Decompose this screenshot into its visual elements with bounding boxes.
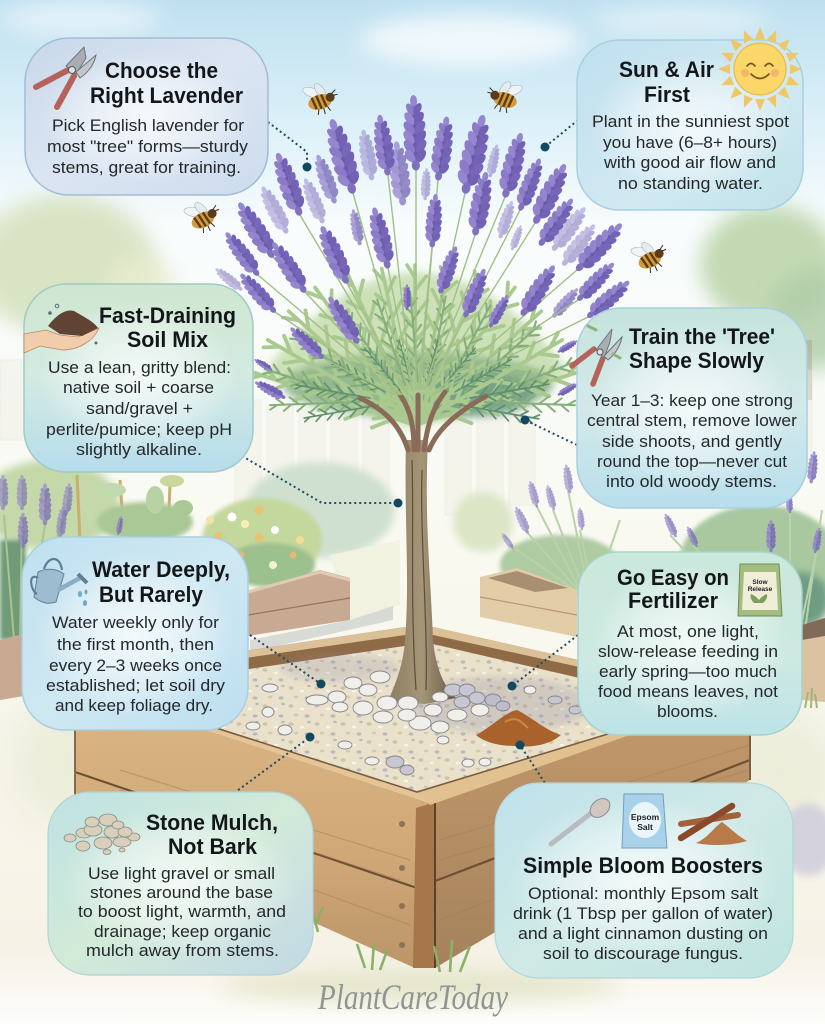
heading: First xyxy=(644,82,691,107)
body text xyxy=(78,864,286,960)
back rim xyxy=(100,627,720,708)
body text xyxy=(46,358,232,459)
body text xyxy=(47,116,249,177)
heading: Right Lavender xyxy=(90,83,243,108)
flower stems xyxy=(258,170,588,395)
body text: round the top—never cut xyxy=(597,452,787,471)
body text: blooms. xyxy=(657,702,718,721)
pale background spikes xyxy=(212,128,602,295)
bee 4 xyxy=(627,233,673,278)
icon: epsom salt bag xyxy=(622,794,667,848)
body text: with good air flow and xyxy=(603,153,776,172)
icon: watering can xyxy=(31,559,88,606)
heading: Fast-Draining xyxy=(99,303,236,328)
body text: central stem, remove lower xyxy=(587,411,797,430)
icon: epsom salt bag: Epsom xyxy=(631,812,660,822)
panel: stone mulch not bark xyxy=(48,792,313,975)
heading xyxy=(99,303,236,352)
heading: Train the 'Tree' xyxy=(629,324,775,349)
body text: perlite/pumice; keep pH xyxy=(46,420,232,439)
body text: established; let soil dry xyxy=(46,676,226,695)
body text xyxy=(592,112,789,193)
front rim xyxy=(75,687,430,803)
icon: slow release bag: Slow xyxy=(752,579,769,586)
grass tufts xyxy=(312,907,470,972)
pale shrubs behind the fence line xyxy=(245,462,395,558)
body text: Plant in the sunniest spot xyxy=(592,112,789,131)
icon: stones pile xyxy=(64,814,140,854)
body text: side shoots, and gently xyxy=(602,432,783,451)
body text: every 2–3 weeks once xyxy=(49,656,222,675)
body text xyxy=(46,613,226,715)
panel: train the tree shape slowly xyxy=(572,308,807,508)
background lavender bush right xyxy=(499,451,825,630)
heading xyxy=(617,565,729,613)
heading xyxy=(629,324,775,373)
icon: cinnamon sticks xyxy=(681,806,747,845)
heading: But Rarely xyxy=(99,582,204,607)
body text: Pick English lavender for xyxy=(52,116,244,135)
body text: food means leaves, not xyxy=(598,682,778,701)
bed right face xyxy=(430,693,750,968)
body text: you have (6–8+ hours) xyxy=(603,133,777,152)
icon: hand with soil xyxy=(24,304,99,353)
panel: fast-draining soil mix xyxy=(24,284,253,472)
panel: sun and air first xyxy=(577,27,803,210)
icon: slow release bag: Release xyxy=(748,586,773,593)
heading xyxy=(90,58,243,108)
tree trunk xyxy=(388,440,456,704)
body text: stems, great for training. xyxy=(52,158,241,177)
background lavender bush left xyxy=(0,475,75,640)
body text: most "tree" forms—sturdy xyxy=(47,137,249,156)
lavender flower spikes xyxy=(218,95,636,404)
heading: Simple Bloom Boosters xyxy=(523,853,763,878)
corner post xyxy=(413,802,435,968)
body text: soil to discourage fungus. xyxy=(543,944,743,963)
connector dots xyxy=(302,142,550,750)
body text xyxy=(513,884,773,963)
stone mulch around trunk xyxy=(246,671,581,775)
body text: At most, one light, xyxy=(617,622,759,641)
body text: drink (1 Tbsp per gallon of water) xyxy=(513,904,773,923)
body text: Optional: monthly Epsom salt xyxy=(528,884,758,903)
body text: and a light cinnamon dusting on xyxy=(518,924,768,943)
body text: Year 1–3: keep one strong xyxy=(591,391,793,410)
heading: Water Deeply, xyxy=(92,557,230,582)
heading: Soil Mix xyxy=(127,327,209,352)
body text: to boost light, warmth, and xyxy=(78,902,286,921)
body text: sand/gravel + xyxy=(86,399,193,418)
body text: no standing water. xyxy=(618,174,763,193)
heading: Not Bark xyxy=(168,834,258,859)
panel: go easy on fertilizer xyxy=(578,552,802,735)
heading: Shape Slowly xyxy=(629,348,765,373)
icon: slow release bag xyxy=(738,564,782,616)
panel: simple bloom boosters xyxy=(495,783,793,978)
body text xyxy=(587,391,797,491)
lavender tree canopy xyxy=(212,95,636,450)
bee 1 xyxy=(299,77,342,119)
fence xyxy=(0,360,812,515)
icon: sun xyxy=(718,27,802,111)
body text: into old woody stems. xyxy=(606,472,777,491)
connector lines xyxy=(222,120,578,812)
panel: water deeply but rarely xyxy=(22,537,248,730)
icon: pruners xyxy=(36,47,96,107)
body text: mulch away from stems. xyxy=(86,941,279,960)
body text: drainage; keep organic xyxy=(94,922,271,941)
body text: stones around the base xyxy=(90,883,273,902)
cinnamon pile xyxy=(476,710,561,747)
body text: Use a lean, gritty blend: xyxy=(48,358,231,377)
watermark: PlantCareToday xyxy=(317,977,508,1017)
bee 3 xyxy=(180,193,226,238)
body text: Water weekly only for xyxy=(52,613,219,632)
bee 2 xyxy=(483,75,526,117)
heading xyxy=(146,810,278,859)
body text: slow-release feeding in xyxy=(598,642,778,661)
heading xyxy=(619,57,714,107)
body text: Use light gravel or small xyxy=(88,864,275,883)
body text: the first month, then xyxy=(57,635,214,654)
heading: Fertilizer xyxy=(628,588,718,613)
tree branches xyxy=(360,392,486,450)
heading: Go Easy on xyxy=(617,565,729,590)
body text: slightly alkaline. xyxy=(76,440,202,459)
heading: Sun & Air xyxy=(619,57,714,82)
body text: native soil + coarse xyxy=(63,378,214,397)
background flower shrub xyxy=(202,498,322,587)
body text: and keep foliage dry. xyxy=(55,696,213,715)
heading: Choose the xyxy=(105,58,218,83)
background raised beds xyxy=(0,568,825,708)
background herbs xyxy=(77,475,193,542)
icon: pruners xyxy=(572,326,622,384)
icon: spoon xyxy=(551,795,614,844)
heading xyxy=(92,557,230,607)
heading: Stone Mulch, xyxy=(146,810,278,835)
bed left face xyxy=(75,687,430,968)
panel: choose the right lavender xyxy=(25,38,268,195)
body text xyxy=(598,622,778,721)
gravel soil xyxy=(100,644,700,792)
body text: early spring—too much xyxy=(599,662,777,681)
raised bed xyxy=(75,627,750,972)
icon: epsom salt bag: Salt xyxy=(637,822,653,832)
foliage mass xyxy=(244,265,586,440)
